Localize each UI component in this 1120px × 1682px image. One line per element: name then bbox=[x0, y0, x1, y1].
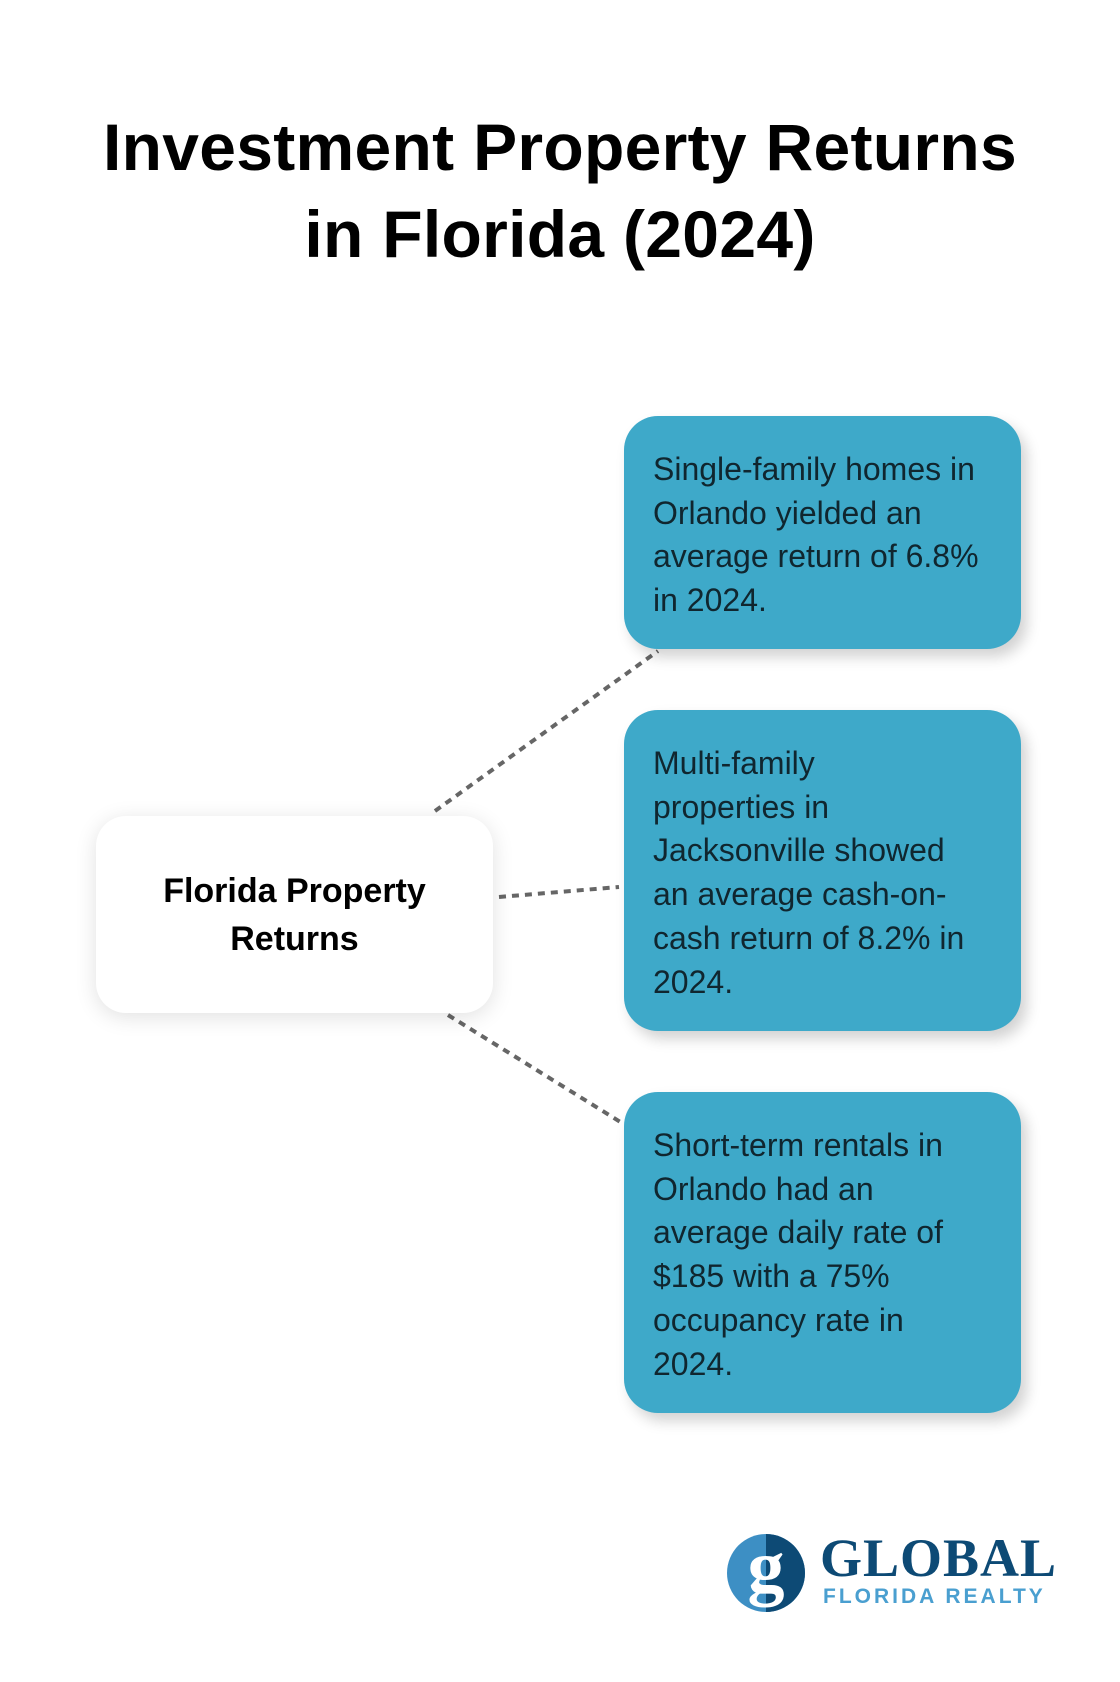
box: short-term rentals: occupancy rate in bbox=[653, 1302, 904, 1338]
logo bbox=[727, 1528, 1057, 1612]
box: short-term rentals bbox=[624, 1092, 1021, 1413]
box: single-family: Single-family homes in bbox=[653, 451, 975, 487]
title bbox=[103, 110, 1017, 271]
box: single-family: in 2024. bbox=[653, 582, 767, 618]
logo text: GLOBAL bbox=[820, 1528, 1057, 1588]
box: short-term rentals: Orlando had an bbox=[653, 1171, 874, 1207]
title: in Florida (2024) bbox=[304, 197, 816, 271]
box: short-term rentals: average daily rate of bbox=[653, 1214, 943, 1250]
box: single-family: Orlando yielded an bbox=[653, 495, 922, 531]
box: multi-family: 2024. bbox=[653, 964, 733, 1000]
center node: Returns bbox=[230, 920, 359, 958]
center node: Florida Property bbox=[163, 872, 426, 910]
box: short-term rentals: Short-term rentals in bbox=[653, 1127, 943, 1163]
box: multi-family: cash return of 8.2% in bbox=[653, 920, 964, 956]
box: multi-family: an average cash-on- bbox=[653, 876, 947, 912]
box: single-family bbox=[624, 416, 1021, 649]
logo: FLORIDA REALTY bbox=[823, 1585, 1046, 1608]
box: multi-family: Multi-family bbox=[653, 745, 815, 781]
box: short-term rentals: 2024. bbox=[653, 1346, 733, 1382]
icon: g circle bbox=[727, 1533, 805, 1612]
box: single-family: average return of 6.8% bbox=[653, 538, 979, 574]
box: multi-family: properties in bbox=[653, 789, 829, 825]
box: multi-family bbox=[624, 710, 1021, 1031]
center node bbox=[96, 816, 493, 1013]
box: short-term rentals: $185 with a 75% bbox=[653, 1258, 890, 1294]
box: multi-family: Jacksonville showed bbox=[653, 832, 945, 868]
title: Investment Property Returns bbox=[103, 110, 1017, 184]
